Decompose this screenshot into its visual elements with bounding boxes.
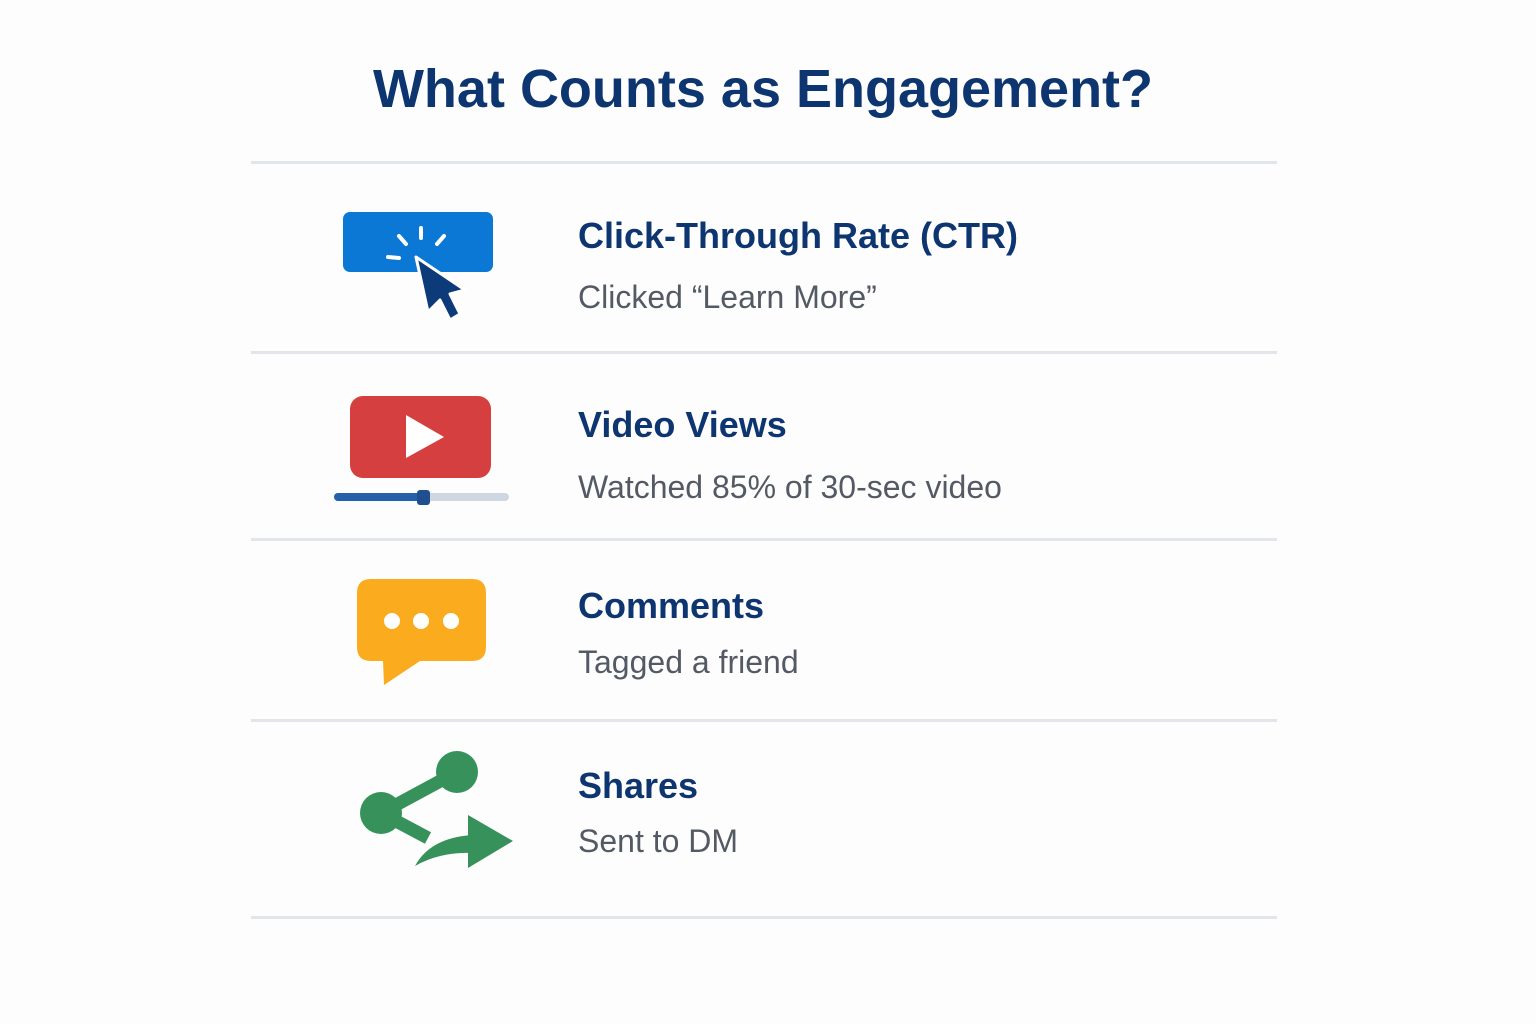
title: What Counts as Engagement? <box>373 59 1153 119</box>
icon: share <box>360 751 513 868</box>
icon: video <box>334 396 509 505</box>
heading: video: Video Views <box>578 404 787 445</box>
icon: click button <box>343 212 493 318</box>
heading: CTR: Click-Through Rate (CTR) <box>578 215 1018 256</box>
text: comments: Tagged a friend <box>578 644 799 680</box>
text: CTR: Clicked “Learn More” <box>578 279 877 315</box>
text: video: Watched 85% of 30-sec video <box>578 469 1002 505</box>
heading: shares: Shares <box>578 765 698 806</box>
heading: comments: Comments <box>578 585 764 626</box>
text: shares: Sent to DM <box>578 823 738 859</box>
icon: comments <box>357 579 486 685</box>
